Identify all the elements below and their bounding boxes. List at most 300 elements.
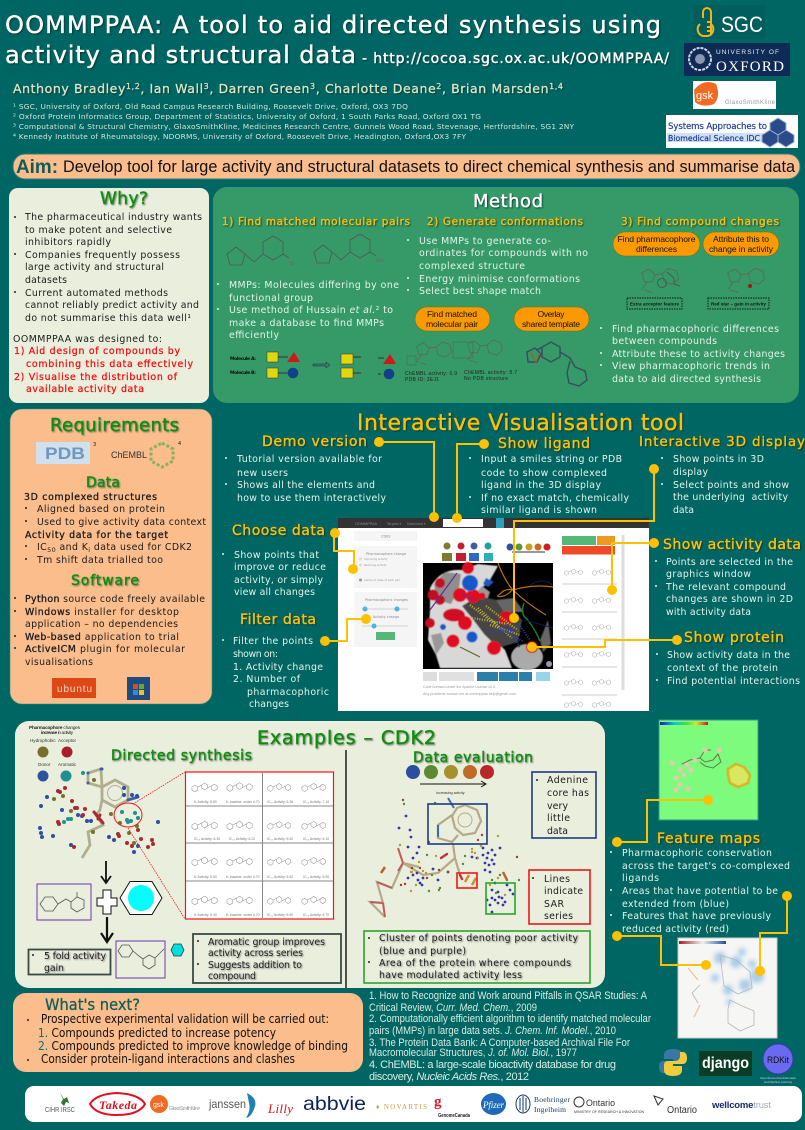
callout: lines indicate SAR series xyxy=(529,870,590,924)
step 2: generate conformations: Energy minimise conformations xyxy=(419,274,580,285)
licence note: Code licensed under the Apache License v2.0. xyxy=(423,685,496,689)
authors: , Ian Wall xyxy=(140,81,203,96)
logo: PDB: 3 xyxy=(93,442,96,448)
callout: lines indicate SAR series: SAR xyxy=(544,899,564,910)
molecules with activities: PDB ID: 3EJ1 xyxy=(405,377,439,383)
logo: University of Oxford: UNIVERSITY OF xyxy=(716,49,779,56)
what's next bullets: 2. Compounds predicted to improve knowledge of binding xyxy=(38,1039,348,1053)
pharmacophore legend: Hydrophobic Acceptor xyxy=(30,738,76,743)
heading: feature maps: Feature maps xyxy=(657,831,760,847)
molecules: Br xyxy=(290,261,295,267)
design goals: available activity data xyxy=(26,384,144,395)
title: OOMMPPAA: A tool to aid directed synthesis using xyxy=(5,11,661,39)
logo: Ontario: Ontario xyxy=(667,1105,697,1116)
sidebar controls: Activity change xyxy=(373,615,399,619)
compound list xyxy=(562,535,623,708)
molecule: extra acceptor feature: Extra acceptor feature xyxy=(630,302,680,306)
authors: Anthony Bradley xyxy=(13,81,125,96)
step 3: find compound changes: data to aid directed synthesis xyxy=(612,374,761,385)
logo: ubuntu xyxy=(52,678,96,698)
molecules xyxy=(227,234,383,267)
callout: filter data: changes xyxy=(249,699,289,710)
design goals: combining this data effectively xyxy=(26,359,193,370)
step 3: find compound changes: View pharmacophoric trends in xyxy=(612,361,770,372)
aim banner: Aim: xyxy=(16,157,58,178)
callout: interactive 3D display: Interactive 3D display xyxy=(639,434,805,450)
logo: Takeda: Takeda xyxy=(99,1098,137,1112)
callout: cluster of points: have modulated activity less xyxy=(379,970,522,981)
logo: ChEMBL: ChEMBL xyxy=(111,450,147,460)
logo: python xyxy=(659,1049,687,1076)
molecule: red star gain in activity: Red star – gain in activity xyxy=(711,302,767,306)
callout: choose data: view all changes xyxy=(234,587,315,598)
step 1: find matched molecular pairs: MMPs: Molecules differing by one xyxy=(229,280,399,291)
callout: filter data: Filter the points xyxy=(233,636,313,647)
affiliations: ¹ SGC, University of Oxford, Old Road Campus Research Building, Roosevelt Drive, Oxford, OX3 7DQ xyxy=(13,102,408,111)
callout: show ligand: Show ligand xyxy=(498,436,590,452)
references: Critical Review, Curr. Med. Chem., 2009 xyxy=(369,1002,537,1014)
feature map: green xyxy=(659,720,758,820)
callout: adenine core: little xyxy=(547,813,570,824)
logo: GSK strip: gsk xyxy=(153,1102,164,1109)
callout: show protein: context of the protein xyxy=(667,663,778,674)
logo: GSK: gsk xyxy=(696,90,714,102)
step 3: find compound changes: between compounds xyxy=(612,336,717,347)
logo: PDB xyxy=(36,442,96,464)
logo: GSK strip xyxy=(150,1095,200,1113)
screenshot: OOMMPPAA web app xyxy=(338,518,649,711)
callout: demo version: new users xyxy=(237,468,288,479)
molecules with activities: ChEMBL activity: 8.7 xyxy=(464,370,517,376)
callout: cluster of points: (blue and purple) xyxy=(379,946,466,957)
references: 3. The Protein Data Bank: A Computer-based Archival File For xyxy=(369,1037,630,1049)
logo: Genome Canada: GenomeCanada xyxy=(438,1113,470,1119)
callout: lines indicate SAR series: Lines xyxy=(544,874,570,885)
pill: attribute to activity change xyxy=(703,232,779,256)
ligand with activity points xyxy=(370,798,519,917)
feature map bullets: Pharmacophoric conservation xyxy=(622,848,772,859)
callout: filter data xyxy=(223,612,371,710)
ligand with pharmacophore points xyxy=(40,769,158,858)
callout: demo version: Demo version xyxy=(262,434,367,450)
navigation bar: Download ▾ xyxy=(407,522,426,526)
authors: , Darren Green xyxy=(209,81,309,96)
data requirements: Tm shift data trialled too xyxy=(36,555,163,566)
logo: django xyxy=(699,1051,752,1076)
highlighted aromatic cluster xyxy=(114,772,185,919)
step 2: generate conformations: complexed structure xyxy=(419,261,525,272)
feature map bullets: extended from (blue) xyxy=(622,899,729,910)
callout: show activity data: Points are selected in the xyxy=(666,557,793,568)
callout: demo version xyxy=(226,434,439,522)
why bullets: Current automated methods xyxy=(25,288,168,299)
logo: RDKit: RDKit xyxy=(767,1055,789,1065)
logo: SGC: SGC xyxy=(721,12,763,37)
callout: show ligand: similar ligand is shown xyxy=(481,505,597,516)
logo: Boehringer Ingelheim: Boehringer xyxy=(534,1095,570,1104)
step 1: find matched molecular pairs: make a database to find MMPs xyxy=(229,318,384,329)
logo: Boehringer Ingelheim xyxy=(516,1095,570,1114)
callout: show protein: Show protein xyxy=(684,630,784,646)
pharmacophore and activity legend xyxy=(442,542,550,561)
logo: Novartis: ♦ NOVARTIS xyxy=(376,1103,427,1111)
callout: choose data: Show points that xyxy=(234,550,319,561)
data requirements: 50 xyxy=(47,546,56,554)
arrow: feature map connector lower xyxy=(612,931,711,970)
compound activity table: Kᵢ Inactive: under 4.70 xyxy=(226,913,260,917)
sidebar controls xyxy=(354,531,417,647)
compound activity table: Kᵢ Activity: 6.60 xyxy=(194,800,217,804)
callout: 5 fold activity gain: 5 fold activity xyxy=(44,951,106,962)
callout: adenine core: very xyxy=(547,801,568,812)
logo: GSK: GlaxoSmithKline xyxy=(725,100,776,106)
references xyxy=(369,990,651,1083)
compound activity table: IC₅₀ Activity: 5.92 xyxy=(267,875,293,879)
callout: show protein: Find potential interactions xyxy=(667,676,800,687)
pill: attribute to activity change: Attribute this to xyxy=(713,234,769,244)
sidebar controls: Pharmacophoric changes xyxy=(365,598,408,602)
compound activity table: IC₅₀ Activity: 5.92 xyxy=(267,837,293,841)
callout: lines indicate SAR series: indicate xyxy=(544,886,583,897)
callout: show ligand: code to show complexed xyxy=(481,468,607,479)
step 2: generate conformations: 2) Generate conformations xyxy=(427,216,583,228)
compound activity table: IC₅₀ Activity: 7.10 xyxy=(303,800,329,804)
arrow: filter data connector xyxy=(320,614,371,646)
logo: RDKit: and Machine Learning xyxy=(764,1080,792,1084)
callout: show ligand: Input a smiles string or PDB xyxy=(481,454,622,465)
navigation bar: OOMMPPAA xyxy=(355,521,377,526)
step 1: find matched molecular pairs: efficiently xyxy=(229,330,279,341)
affiliations: ² Oxford Protein Informatics Group, Department of Statistics, University of Oxford, 1 South Parks Road, Oxford OX1 TG xyxy=(13,112,481,121)
sidebar controls: CDK2 xyxy=(381,534,391,538)
molecules with activities: ChEMBL activity: 6.9 xyxy=(405,371,457,377)
callout: cluster of points: Cluster of points denoting poor activity xyxy=(379,933,578,944)
feature map bullets: Features that have previously xyxy=(622,911,771,922)
data requirements: i xyxy=(88,546,90,554)
callout: choose data: activity, or simply xyxy=(234,575,323,586)
step 3: find compound changes: Find pharmacophoric differences xyxy=(612,324,779,335)
licence note xyxy=(423,685,516,696)
logo: Lilly: Lilly xyxy=(267,1101,293,1116)
callout: filter data: 2. Number of xyxy=(233,674,301,685)
references: 2. Computationally efficient algorithm to identify matched molecular xyxy=(369,1013,651,1025)
why bullets: Companies frequently possess xyxy=(25,250,180,261)
callout: interactive 3D display: Select points and show xyxy=(673,480,789,491)
compound activity table: IC₅₀ Activity: 5.90 xyxy=(303,875,329,879)
logo: abbvie: abbvie xyxy=(303,1094,366,1115)
step 2: generate conformations: ordinates for compounds with no xyxy=(419,248,588,259)
affiliations: ⁴ Kennedy Institute of Rheumatology, NDORMS, University of Oxford, Roosevelt Drive, Headington, Oxford,OX3 7FY xyxy=(13,132,466,141)
software requirements: visualisations xyxy=(25,657,93,668)
data requirements: Used to give activity data context xyxy=(37,517,206,528)
pill: find matched molecular pair: molecular pair xyxy=(426,319,478,329)
callout: interactive 3D display: the underlying activity xyxy=(673,492,788,503)
heading: data evaluation: Data evaluation xyxy=(413,750,533,766)
sidebar controls: Centre of mass of each pair xyxy=(364,578,401,582)
heading: data: Data xyxy=(86,475,120,491)
title xyxy=(5,11,669,69)
logo: Ontario ministry: MINISTRY OF RESEARCH & INNOVATION xyxy=(574,1110,644,1114)
design goals: OOMMPPAA was designed to: xyxy=(13,334,162,345)
logo: Takeda xyxy=(90,1093,145,1115)
arrow: show ligand connector xyxy=(452,439,489,523)
panel: what's next xyxy=(13,993,363,1072)
logo: janssen: janssen xyxy=(208,1097,246,1111)
compound activity table: IC₅₀ Activity: 6.30 xyxy=(194,837,220,841)
authors: 3 xyxy=(204,82,209,91)
callout: demo version: Shows all the elements and xyxy=(237,480,375,491)
logo: janssen xyxy=(208,1093,255,1118)
step 1: find matched molecular pairs: 1) Find matched molecular pairs xyxy=(222,216,410,228)
callout: cluster of points xyxy=(364,931,590,983)
step 3: find compound changes xyxy=(601,216,785,385)
callout: interactive 3D display xyxy=(509,434,805,623)
logo: Pfizer: Pfizer xyxy=(482,1100,504,1110)
pill: find pharmacophore differences: Find pharmacophore xyxy=(618,234,696,244)
logo: Pfizer xyxy=(481,1093,506,1115)
activity colour scale xyxy=(406,765,494,795)
callout: lines indicate SAR series: series xyxy=(544,911,573,922)
title: activity and structural data xyxy=(5,41,356,69)
logo: RDKit xyxy=(760,1044,796,1084)
data requirements: Activity data for the target xyxy=(25,530,168,541)
logo: SGC xyxy=(693,5,765,39)
why bullets: inhibitors rapidly xyxy=(25,237,111,248)
callout: interactive 3D display: Show points in 3D xyxy=(673,454,764,465)
authors: 1,4 xyxy=(549,82,563,91)
highlight boxes xyxy=(428,804,515,914)
logo: ChEMBL xyxy=(111,441,181,467)
logo: CIHR: CIHR IRSC xyxy=(45,1107,75,1114)
molecules with activities xyxy=(405,340,587,386)
callout: show activity data: Show activity data xyxy=(663,537,801,553)
step 1: find matched molecular pairs: Use method of Hussain et al.² to xyxy=(229,305,393,316)
logo: django: django xyxy=(702,1055,749,1072)
callout: show protein xyxy=(527,630,800,687)
why bullets: cannot reliably predict activity and xyxy=(25,300,199,311)
data requirements: IC xyxy=(37,542,47,553)
design goals xyxy=(13,334,193,395)
callout: show activity data: changes are shown in 2D xyxy=(666,594,793,605)
compound activity table: Kᵢ Inactive: under 4.70 xyxy=(226,875,260,879)
callout: filter data: pharmacophoric xyxy=(247,687,329,698)
logo: Systems Approaches to Biomedical Science IDC xyxy=(666,115,798,148)
arrow: feature map connector top xyxy=(612,795,713,847)
MMP diagram: Molecule A: xyxy=(230,356,256,362)
logo: University of Oxford: OXFORD xyxy=(716,59,784,75)
data requirements: 3D complexed structures xyxy=(24,492,157,503)
callout: aromatic group improves activity xyxy=(193,934,341,983)
step 3: find compound changes: 3) Find compound changes xyxy=(621,216,779,228)
heading: why: Why? xyxy=(100,189,148,209)
logo: Boehringer Ingelheim: Ingelheim xyxy=(534,1105,566,1114)
compound activity table: IC₅₀ Activity: 6.22 xyxy=(229,837,255,841)
arrow: show protein connector xyxy=(527,635,682,652)
logo: Genome Canada: g xyxy=(434,1094,442,1110)
callout: show ligand: ligand in the 3D display xyxy=(481,480,601,491)
feature map bullets: reduced activity (red) xyxy=(622,924,729,935)
callout: demo version: Tutorial version available for xyxy=(236,454,382,465)
logo: RDKit: Open-Source Cheminformatics xyxy=(760,1076,796,1080)
pill: find matched molecular pair: Find matched xyxy=(427,309,477,319)
feature map bullets: ligands xyxy=(622,873,659,884)
software requirements: Web-based application to trial xyxy=(25,632,179,643)
compound activity table: Kᵢ Activity: 6.60 xyxy=(194,875,217,879)
pill: find pharmacophore differences xyxy=(613,232,700,256)
navigation bar: Targets ▾ xyxy=(386,522,402,526)
logo: Ontario xyxy=(654,1096,697,1116)
molecule: extra acceptor feature xyxy=(627,268,682,309)
logo: GSK strip: GlaxoSmithKline xyxy=(169,1106,200,1112)
licence note: Any problems contact me at oommppaa.help@gmail.com xyxy=(423,692,516,696)
plus sign xyxy=(97,890,117,914)
what's next bullets: Consider protein-ligand interactions and clashes xyxy=(41,1052,295,1066)
step 2: generate conformations xyxy=(405,216,589,386)
logo: PDB: PDB xyxy=(45,444,85,463)
references: 1. How to Recognize and Work around Pitfalls in QSAR Studies: A xyxy=(369,990,648,1002)
references: Macromolecular Structures, J. of. Mol. Biol., 1977 xyxy=(369,1047,577,1059)
callout: interactive 3D display: data xyxy=(673,505,694,516)
callout: adenine core: Adenine xyxy=(547,775,588,786)
feature map bullets xyxy=(611,848,790,935)
authors: , Charlotte Deane xyxy=(316,81,436,96)
compound activity table xyxy=(186,772,334,919)
design goals: 1) Aid design of compounds by xyxy=(14,346,180,357)
callout: filter data: Filter data xyxy=(240,612,316,628)
callout: choose data xyxy=(223,523,358,598)
logo: ChEMBL: 4 xyxy=(178,441,181,447)
software requirements: ActiveICM plugin for molecular xyxy=(25,644,185,655)
compound activity table: IC₅₀ Activity: 6.36 xyxy=(267,800,293,804)
arrow: down to fragments xyxy=(101,861,111,883)
design goals: 2) Visualise the distribution of xyxy=(14,372,178,383)
authors: 2 xyxy=(436,82,441,91)
compound activity table: IC₅₀ Activity: 5.70 xyxy=(303,913,329,917)
pharmacophore legend: increase in activity xyxy=(41,730,74,735)
logo: GSK xyxy=(693,81,776,109)
step 3: find compound changes: Attribute these to activity changes xyxy=(612,349,785,360)
feature map bullets: across the target's co-complexed xyxy=(622,861,790,872)
panel: requirements xyxy=(10,409,212,704)
step 2: generate conformations: Use MMPs to generate co- xyxy=(419,236,551,247)
authors: 3 xyxy=(310,82,315,91)
pill: overlay shared template: shared template xyxy=(522,319,580,329)
what's next bullets: 1. Compounds predicted to increase potency xyxy=(38,1026,276,1040)
title: - http://cocoa.sgc.ox.ac.uk/OOMMPPAA/ xyxy=(362,51,669,67)
logo: Systems Approaches to Biomedical Science IDC: Biomedical Science IDC xyxy=(668,134,761,143)
callout: aromatic group improves activity: Aromatic group improves xyxy=(208,937,325,948)
callout: adenine core: data xyxy=(547,826,568,837)
references: 4. ChEMBL: a large-scale bioactivity database for drug xyxy=(369,1059,616,1071)
callout: 5 fold activity gain: gain xyxy=(44,963,64,974)
pill: overlay shared template: Overlay xyxy=(538,309,565,319)
step 1: find matched molecular pairs xyxy=(218,216,410,379)
data requirements xyxy=(24,492,206,566)
funders logo strip xyxy=(25,1086,802,1122)
sidebar controls: Reducing activity xyxy=(364,563,387,567)
logo: Ontario ministry xyxy=(574,1097,644,1114)
callout: choose data: Choose data xyxy=(232,523,325,539)
why bullets xyxy=(15,212,202,324)
arrow: 3D display connector xyxy=(509,464,659,623)
heading: what's next: What's next? xyxy=(45,995,140,1014)
panel: why xyxy=(9,188,209,403)
callout: show protein: Show activity data in the xyxy=(667,650,790,661)
logo: University of Oxford xyxy=(684,43,790,76)
heading: requirements: Requirements xyxy=(50,415,179,436)
callout: show activity data: with activity data xyxy=(666,607,751,618)
pharmacophore legend: Donor xyxy=(38,762,51,767)
navigation bar xyxy=(338,518,649,528)
callout: aromatic group improves activity: compound xyxy=(208,971,256,982)
feature map: white xyxy=(678,938,777,1038)
pharmacophore legend xyxy=(29,725,81,782)
why bullets: large activity and structural xyxy=(25,262,164,273)
panel: method xyxy=(213,187,799,403)
molecule: red star gain in activity xyxy=(708,268,769,309)
compound activity table: IC₅₀ Activity: 5.90 xyxy=(267,913,293,917)
aromatic group hexagon xyxy=(120,882,162,914)
affiliations xyxy=(13,102,574,141)
heading: directed synthesis: Directed synthesis xyxy=(111,748,252,764)
compound activity table: IC₅₀ Activity: 6.10 xyxy=(303,837,329,841)
software requirements: Python source code freely available xyxy=(25,594,205,605)
heading: interactive visualisation tool: Interactive Visualisation tool xyxy=(357,411,684,436)
panel: examples CDK2 xyxy=(15,721,605,988)
pill: find matched molecular pair xyxy=(415,307,490,331)
logo: ubuntu: ubuntu xyxy=(57,684,92,695)
why bullets: do not summarise this data well¹ xyxy=(25,313,191,324)
callout: show ligand xyxy=(452,436,629,523)
heading: examples: Examples – CDK2 xyxy=(257,727,436,749)
logo: Ontario ministry: Ontario xyxy=(586,1098,615,1108)
callout: filter data: shown on: xyxy=(233,649,278,660)
arrow: choose data connector xyxy=(330,528,358,574)
callout: 5 fold activity gain xyxy=(28,950,110,974)
step 2: generate conformations: Select best shape match xyxy=(419,286,541,297)
callout: filter data: 1. Activity change xyxy=(233,662,323,673)
callout: adenine core: core has xyxy=(547,788,589,799)
software requirements xyxy=(15,594,205,668)
feature map bullets: Areas that have potential to be xyxy=(622,886,778,897)
callout: show activity data: The relevant compound xyxy=(665,582,786,593)
callout: choose data: improve or reduce xyxy=(234,562,326,573)
authors: , Brian Marsden xyxy=(442,81,549,96)
authors: 1,2 xyxy=(126,82,140,91)
what's next bullets: Prospective experimental validation will be carried out: xyxy=(41,1012,329,1026)
pill: find pharmacophore differences: differences xyxy=(636,244,677,254)
activity colour scale: Increasing activity xyxy=(436,791,465,795)
result structure xyxy=(116,941,184,978)
why bullets: datasets xyxy=(25,275,67,286)
callout: show activity data: graphics window xyxy=(666,569,751,580)
pharmacophore legend: Aromatic xyxy=(58,762,77,767)
data requirements: and K xyxy=(56,542,89,553)
3D protein viewer xyxy=(423,562,553,670)
heading: method: Method xyxy=(473,191,543,212)
callout: interactive 3D display: display xyxy=(673,467,708,478)
MMP diagram xyxy=(230,352,396,379)
compound activity table: Kᵢ Activity: 5.30 xyxy=(194,913,217,917)
data requirements: data used for CDK2 xyxy=(90,542,192,553)
callout: aromatic group improves activity: activity across series xyxy=(208,948,303,959)
step 1: find matched molecular pairs: functional group xyxy=(229,293,313,304)
logo: wellcome trust: wellcometrust xyxy=(711,1100,771,1111)
arrow: demo version connector xyxy=(374,437,439,522)
logo: Genome Canada xyxy=(434,1094,470,1119)
divider xyxy=(345,750,347,988)
data requirements: Aligned based on protein xyxy=(37,504,165,515)
